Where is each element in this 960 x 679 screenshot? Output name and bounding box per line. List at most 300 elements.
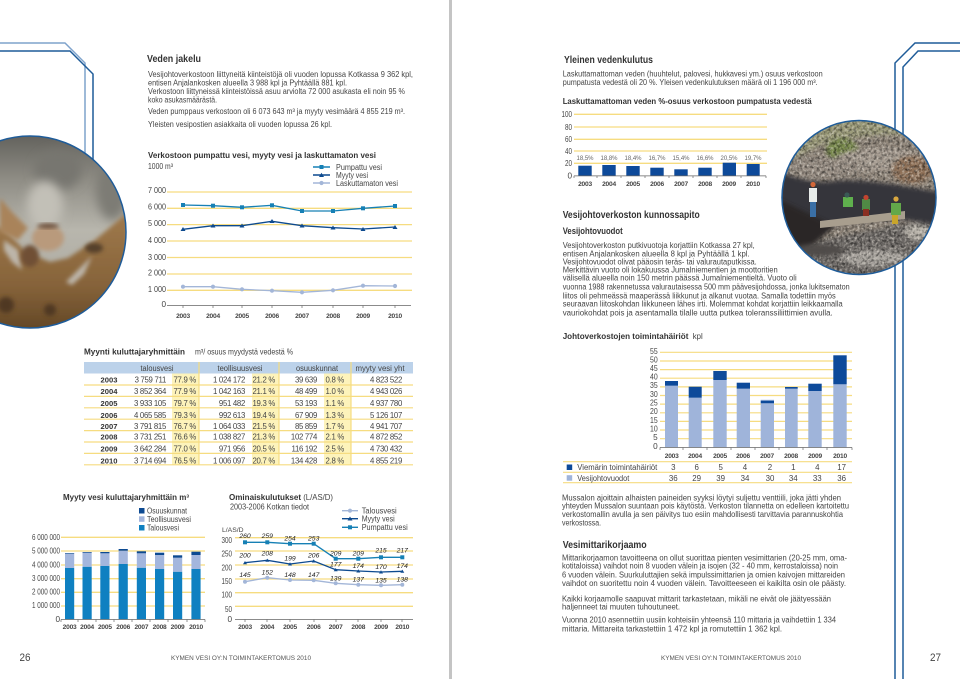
row 2005: 3 933 105 (134, 399, 167, 408)
y axis labels: 3 000 000 (32, 574, 60, 583)
body text: Veden jakelu (148, 70, 413, 129)
data labels: 206 (307, 552, 320, 559)
row 2007: 76.7 % (174, 422, 196, 431)
x axis labels: 2006 (736, 453, 750, 460)
row 2006 (101, 411, 402, 420)
y axis labels: 20 (565, 159, 572, 168)
row 2009: 116 192 (291, 444, 317, 453)
row 2003: 77.9 % (174, 375, 196, 384)
y axis labels: 4 000 (148, 236, 166, 245)
legend (342, 506, 408, 532)
x axis labels: 2008 (153, 624, 167, 631)
y axis labels: 4 000 000 (32, 560, 60, 570)
legend: Pumpattu vesi (362, 523, 408, 532)
legend: Talousvesi (147, 524, 179, 533)
row 2010: 20.7 % (253, 457, 275, 466)
x axis labels: 2009 (171, 624, 185, 631)
x axis labels: 2010 (746, 181, 760, 188)
y axis labels: 7 000 (148, 186, 166, 195)
data labels: 139 (330, 576, 342, 583)
axis line (167, 306, 411, 308)
bars: Teollisuusvesi (65, 551, 201, 572)
axis line (660, 448, 852, 450)
row 2008: 76.6 % (174, 433, 196, 442)
row 2010: 4 855 219 (370, 457, 402, 466)
row 2003: 39 639 (295, 375, 317, 384)
x axis labels: 2008 (351, 624, 366, 631)
data labels: 138 (397, 577, 408, 584)
row 2009: 4 730 432 (370, 444, 402, 453)
row 2008: 1 038 827 (213, 433, 245, 442)
row 2007 (101, 422, 402, 431)
data table row: Viemärin toimintahäiriöt: 2 (768, 463, 772, 472)
left page corner lines (0, 43, 93, 162)
y axis labels: 25 (650, 398, 658, 408)
row 2003: 4 823 522 (370, 375, 402, 384)
body text: vauriokohdat pois ja asentamalla tilalle uutta putkea toleranssiliittimien avulla. (563, 308, 833, 317)
row 2007: 4 941 707 (370, 422, 402, 431)
data labels: 18,8% (600, 156, 618, 162)
page gutter divider (449, 0, 452, 679)
row 2005: 79.7 % (174, 399, 196, 408)
data labels: 18,4% (624, 156, 642, 162)
data labels: 209 (329, 550, 342, 557)
y axis labels: 60 (565, 135, 572, 144)
row 2004: 21.1 % (253, 387, 275, 396)
data labels: 170 (375, 564, 387, 571)
x axis labels: 2004 (206, 313, 220, 320)
row 2007: 85 859 (295, 422, 317, 431)
row 2006: 4 065 585 (134, 411, 167, 420)
data table row: Viemärin toimintahäiriöt: Viemärin toimintahäiriöt (577, 463, 658, 472)
row 2006: 1.3 % (326, 411, 344, 420)
row 2006: 19.4 % (253, 411, 275, 420)
data table row: Viemärin toimintahäiriöt: 17 (837, 463, 846, 472)
body text: vuonna 1988 rakennetussa valurautaisessa 500 mm päävesijohdossa, jonka lukitsematon (563, 283, 850, 292)
body text: 6 vuoden välein. Suurkuluttajien sekä impulssimittarien ja omien kaivojen mittareiden (562, 570, 845, 579)
data table row: Viemärin toimintahäiriöt: 4 (815, 463, 820, 472)
bars: Talousvesi (65, 564, 201, 619)
heading: Vesimittarikorjaamo (563, 539, 647, 551)
worker figures (809, 182, 901, 224)
row 2004: 77.9 % (174, 387, 196, 396)
data table row: Viemärin toimintahäiriöt: 3 (671, 463, 676, 472)
y axis labels: 5 000 000 (32, 546, 60, 556)
chart title: Laskuttamattoman veden %-osuus verkostoon pumpatusta vedestä (563, 97, 812, 106)
row 2010: 134 428 (291, 457, 317, 466)
x axis labels: 2007 (674, 181, 688, 188)
legend: Talousvesi (362, 506, 397, 516)
percent column shading (172, 374, 351, 465)
y axis labels: 40 (650, 372, 658, 382)
y axis labels: 50 (650, 356, 658, 364)
y axis labels: 0 (161, 300, 166, 309)
x axis labels (176, 313, 402, 320)
unit label: L/AS/D (222, 527, 244, 534)
body text: vaihdot on suoritettu noin 4 vuoden välein. Tavoitteeseen ei kaikilta osin ole päästy. (562, 579, 846, 588)
x axis labels: 2005 (235, 313, 249, 320)
y axis labels: 35 (650, 381, 658, 390)
data labels: 16,6% (696, 156, 714, 162)
row 2004: 1 042 163 (213, 387, 245, 396)
row 2003: 2003 (101, 375, 117, 384)
x axis labels: 2008 (698, 181, 712, 188)
row 2003 (101, 375, 402, 384)
row 2010: 1 006 097 (213, 457, 245, 466)
row 2004: 3 852 364 (134, 387, 167, 396)
y axis labels (650, 347, 658, 451)
body text: Veden jakelu: Vesijohtoverkostoon liittyneitä kiinteistöjä oli vuoden lopussa Kotkassa 9 362 kpl, (148, 70, 413, 79)
body text: kotitaloissa) vaihdot noin 8 vuoden välein ja isojen (32 - 40 mm, kerrostaloissa) noin (562, 562, 838, 571)
data labels (576, 156, 762, 162)
sub-heading: Vesijohtovuodot (563, 226, 623, 236)
row 2010: 76.5 % (174, 457, 196, 466)
body text: entisen Anjalankosken alueella 8 kpl ja Pyhtäällä 1 kpl. (563, 250, 750, 258)
y axis labels: 6 000 (148, 202, 166, 212)
y axis labels: 50 (225, 605, 232, 614)
series: Myyty vesi (243, 559, 404, 574)
row 2004: 1.0 % (326, 387, 344, 396)
legend: Teollisuusvesi (147, 515, 191, 524)
y axis labels: 100 (222, 591, 232, 600)
x axis labels: 2007 (329, 624, 343, 631)
y axis labels: 10 (650, 424, 658, 434)
data table row: Viemärin toimintahäiriöt: 6 (695, 463, 700, 472)
y axis labels: 0 (227, 615, 232, 624)
row 2004: 4 943 026 (370, 387, 402, 396)
row 2005: 2005 (101, 399, 118, 408)
text block: Mussalon paineet: verkostomallin avulla ja sen päivitys tuo esiin mahdollisesti tarvittavia parannuskohtia (562, 510, 844, 519)
legend: Pumpattu vesi (336, 163, 382, 172)
data labels: 217 (396, 548, 408, 555)
x axis labels: 2004 (80, 624, 95, 631)
y axis labels: 100 (562, 110, 572, 119)
body text: Vesijohtovuodot olivat pääosin teräs- tai valurautaputkissa. (563, 257, 757, 266)
photo frame left (0, 136, 126, 328)
line chart: Verkostoon pumpattu vesi, myyty vesi ja laskuttamaton vesi (148, 151, 412, 320)
data labels (238, 533, 408, 584)
y axis labels (148, 186, 166, 309)
row 2009: 20.5 % (253, 444, 275, 453)
y axis labels: 2 000 (148, 268, 166, 278)
x axis labels: 2008 (784, 453, 798, 460)
table header labels: teollisuusvesi (218, 364, 263, 373)
data table row: Vesijohtovuodot: Vesijohtovuodot (577, 474, 630, 483)
row 2008: 2008 (101, 433, 117, 442)
row 2006: 67 909 (295, 411, 317, 420)
y axis labels: 15 (650, 416, 658, 425)
row 2008: 2.1 % (326, 433, 344, 442)
x axis labels: 2005 (713, 453, 727, 460)
body text (562, 553, 847, 633)
x axis labels: 2005 (626, 181, 640, 188)
data labels: 18,5% (576, 156, 594, 162)
data table row: Vesijohtovuodot: 39 (716, 474, 726, 483)
body text: pumpatusta vedestä oli 20 %. Yleisen vedenkulutuksen määrä oli 1 196 000 m³. (563, 78, 818, 87)
table unit note: m³/ osuus myydystä vedestä % (195, 348, 293, 356)
axis line (574, 176, 766, 178)
x axis labels: 2009 (808, 453, 822, 460)
x axis labels: 2009 (356, 313, 370, 320)
unit label: 1000 m³ (148, 162, 173, 171)
data labels: 174 (397, 563, 408, 570)
x axis labels: 2007 (134, 624, 149, 631)
row 2005: 4 937 780 (370, 399, 403, 408)
row 2010: 3 714 694 (134, 457, 167, 466)
x axis labels: 2010 (395, 624, 410, 631)
axis line (235, 620, 413, 622)
series: Pumpattu vesi (243, 540, 404, 561)
right page corner lines (895, 43, 960, 679)
table header band (84, 362, 413, 374)
row 2010: 2.8 % (326, 457, 344, 466)
data table row: Viemärin toimintahäiriöt: 1 (791, 463, 795, 472)
data table row: Vesijohtovuodot: 34 (789, 474, 798, 483)
row 2004: 48 499 (295, 387, 317, 396)
text block: Mussalon paineet: yhteyden Mussalon suuntaan pois käytöstä. Verkoston tilannetta on edelleen kartoitettu (562, 502, 849, 511)
heading: Veden jakelu: Veden jakelu (147, 53, 201, 65)
table: Myynti kuluttajaryhmittäin (84, 348, 413, 466)
photo: person under shower (0, 136, 126, 328)
x axis labels: 2005 (98, 624, 112, 631)
bars: Viemärin toimintahäiriöt (665, 355, 847, 403)
axis line (61, 620, 205, 622)
x axis labels: 2003 (176, 313, 190, 320)
x axis labels: 2005 (283, 624, 297, 631)
data labels: 260 (238, 533, 251, 540)
photo frame right (782, 120, 936, 274)
body text: Vuonna 2010 asennettiin uusiin kohteisiin yhteensä 110 mittaria ja vaihdettiin 1 334 (562, 616, 837, 625)
body text: Laskuttamattoman veden (huuhtelut, palovesi, hukkavesi ym.) osuus verkostoon (563, 70, 823, 78)
data labels: 145 (239, 572, 251, 579)
y axis labels: 5 (653, 433, 658, 442)
data labels: 215 (374, 548, 387, 555)
text block: Yleinen vedenkulutus (563, 54, 823, 87)
body text: Merkittävin vuoto oli lokakuussa Jumalniementien ja moottoritien (563, 266, 778, 275)
x axis labels: 2006 (265, 313, 279, 320)
y axis labels: 5 000 (148, 219, 166, 228)
x axis labels: 2003 (665, 453, 679, 460)
body text: Veden jakelu: entisen Anjalankosken alueella 3 988 kpl ja Pyhtäällä 881 kpl. (148, 78, 347, 88)
photo: workers repairing a water pipe (780, 118, 940, 280)
data labels: 208 (261, 551, 273, 558)
x axis labels (665, 453, 847, 460)
row 2009 (101, 444, 402, 453)
series: Talousvesi (243, 576, 404, 587)
legend: Myyty vesi (362, 514, 395, 524)
row 2006: 992 613 (219, 411, 245, 420)
row 2007: 1.7 % (326, 422, 344, 431)
row 2004: 2004 (101, 387, 118, 396)
data labels: 147 (308, 572, 320, 579)
bars: Osuuskunnat (65, 549, 201, 558)
series: Laskuttamaton vesi (181, 284, 397, 294)
row 2005 (101, 399, 403, 408)
data table row: Vesijohtovuodot: 33 (813, 474, 822, 483)
footer right: page number: 27 (930, 652, 941, 664)
x axis labels: 2010 (388, 313, 402, 320)
y axis labels: 0 (55, 615, 60, 624)
y axis labels: 80 (565, 123, 572, 132)
y axis labels: 2 000 000 (32, 588, 60, 596)
row 2006: 5 126 107 (370, 411, 402, 420)
y axis labels: 6 000 000 (32, 533, 60, 542)
data labels: 135 (375, 577, 387, 584)
x axis labels: 2009 (722, 181, 736, 188)
row 2005: 19.3 % (253, 399, 275, 408)
data labels: 137 (353, 577, 364, 584)
x axis labels: 2009 (374, 624, 388, 631)
data table row: Viemärin toimintahäiriöt: 4 (743, 463, 748, 472)
table header labels: myyty vesi yht (356, 364, 405, 373)
bar chart: Laskuttamattoman veden osuus (562, 97, 812, 188)
body text: Veden jakelu: koko asukasmäärästä. (148, 96, 217, 104)
series: Myyty vesi (180, 219, 398, 231)
x axis labels: 2007 (295, 313, 309, 320)
data labels: 174 (353, 563, 364, 570)
data labels: 19,7% (744, 156, 762, 162)
data labels: 199 (284, 555, 296, 562)
row 2003: 21.2 % (253, 375, 275, 384)
y axis labels: 0 (653, 442, 658, 451)
data table row: Vesijohtovuodot: 36 (837, 474, 847, 483)
x axis labels: 2010 (189, 624, 203, 631)
row 2010 (101, 457, 402, 466)
data labels: 209 (352, 550, 364, 557)
row 2009: 3 642 284 (134, 444, 167, 453)
x axis labels: 2006 (307, 624, 321, 631)
row 2008: 4 872 852 (370, 433, 402, 442)
footer left: publication name: KYMEN VESI OY:N TOIMINTAKERTOMUS 2010 (171, 655, 311, 662)
x axis labels: 2004 (602, 181, 616, 188)
footer left: page number: 26 (20, 652, 30, 664)
y axis labels: 55 (650, 347, 658, 356)
body text: välisellä alueella noin 150 metrin päässä Jumalniementieltä. Vuoto oli (563, 274, 797, 283)
series: Pumpattu vesi (181, 203, 397, 213)
row 2006: 79.3 % (174, 411, 196, 420)
legend: Laskuttamaton vesi (336, 179, 398, 188)
row 2005: 1.1 % (326, 399, 344, 408)
data labels: 177 (330, 562, 342, 569)
data table row: Viemärin toimintahäiriöt: 5 (719, 463, 724, 472)
data labels: 148 (284, 572, 296, 579)
row 2008: 3 731 251 (134, 433, 166, 442)
body text (563, 241, 850, 317)
body text: Vesijohtoverkoston putkivuotoja korjattiin Kotkassa 27 kpl, (563, 241, 755, 250)
row 2007: 21.5 % (253, 422, 275, 431)
row 2003: 0.8 % (326, 375, 344, 384)
row 2009: 2.5 % (326, 444, 344, 453)
x axis labels (238, 624, 410, 631)
table header labels (140, 364, 405, 373)
data labels: 200 (238, 553, 251, 560)
row 2003: 1 024 172 (213, 375, 245, 384)
row 2004 (101, 387, 402, 396)
x axis labels: 2010 (833, 453, 847, 460)
section heading: Vesijohtoverkoston kunnossapito (563, 209, 700, 221)
body text: seuraavan liitoskohdan liikkuneen lähes irti. Molemmat kohdat korjattiin leikkaamalla (563, 300, 843, 309)
data labels: 254 (283, 535, 296, 542)
body text: Veden jakelu: Veden pumppaus verkostoon oli 6 073 643 m³ ja myyty vesimäärä 4 855 219 m³. (148, 107, 405, 116)
legend: Myyty vesi (336, 171, 368, 180)
y axis labels: 1 000 000 (32, 601, 60, 610)
row 2007: 2007 (101, 422, 117, 431)
x axis labels: 2003 (238, 624, 252, 631)
bars: Vesijohtovuodot (665, 380, 847, 447)
y axis labels: 1 000 (148, 285, 166, 294)
data labels: 15,4% (672, 156, 690, 162)
x axis labels: 2004 (260, 624, 275, 631)
row 2008 (101, 433, 402, 442)
x axis labels: 2008 (326, 313, 340, 320)
data table row: Vesijohtovuodot: 34 (741, 474, 750, 483)
heading: Yleinen vedenkulutus (564, 54, 653, 66)
legend (313, 163, 398, 188)
text block: Vesimittarikorjaamo (562, 539, 847, 633)
chart subtitle: 2003-2006 Kotkan tiedot (230, 503, 310, 512)
data table row: Viemärin toimintahäiriöt (567, 463, 846, 472)
y axis labels: 300 (222, 536, 232, 545)
x axis labels: 2007 (760, 453, 774, 460)
stacked bar chart: Johtoverkostojen toimintahäiriöt (563, 332, 852, 483)
body text: haljenneet tai muuten tuhoutuneet. (562, 603, 680, 612)
x axis labels: 2003 (578, 181, 592, 188)
chart title: Verkostoon pumpattu vesi, myyty vesi ja laskuttamaton vesi (148, 151, 376, 160)
x axis labels: 2003 (63, 624, 77, 631)
chart title: Ominaiskulutukset (L/AS/D) (229, 493, 333, 502)
bars (578, 163, 760, 176)
y axis labels: 150 (222, 577, 232, 586)
chart title: Myyty vesi kuluttajaryhmittäin m³ (63, 493, 189, 502)
table title: Myynti kuluttajaryhmittäin (84, 348, 185, 356)
y axis labels: 3 000 (148, 253, 166, 262)
text block: Veden jakelu (147, 53, 413, 129)
data labels: 253 (307, 536, 320, 543)
legend: Osuuskunnat (147, 507, 188, 516)
row 2007: 1 064 033 (213, 422, 245, 431)
row 2005: 951 482 (219, 399, 245, 408)
line chart: Ominaiskulutukset (222, 493, 413, 631)
y axis labels: 250 (222, 550, 232, 559)
table header labels: osuuskunnat (296, 364, 339, 373)
body text: liitos oli pehmeässä maaperässä liikkunut ja alkanut vuotaa. Samalla todettiin myös (563, 291, 836, 300)
data table row: Vesijohtovuodot (567, 474, 847, 483)
body text: Mittarikorjaamon tavoitteena on ollut suorittaa pienten vesimittarien (20-25 mm, oma- (562, 553, 847, 562)
data labels: 152 (262, 569, 273, 576)
bar chart: Myyty vesi kuluttajaryhmittäin (32, 493, 205, 631)
text block: Mussalon paineet: verkostossa. (562, 519, 601, 528)
text block: Mussalon paineet (562, 493, 849, 528)
body text: mittaria. Mittareita tarkastettiin 1 472 kpl ja romutettiin 1 362 kpl. (562, 624, 782, 633)
data table row: Vesijohtovuodot: 29 (692, 474, 702, 483)
y axis labels: 200 (222, 563, 232, 572)
x axis labels (63, 624, 203, 631)
data labels: 20,5% (720, 156, 738, 162)
row 2010: 2010 (101, 457, 117, 466)
row 2005: 53 193 (295, 399, 317, 408)
body text: Veden jakelu: Yleisten vesipostien asiakkaita oli vuoden lopussa 26 kpl. (148, 120, 332, 129)
y axis labels (32, 533, 60, 624)
data table row: Vesijohtovuodot: 36 (669, 474, 678, 483)
chart title: Johtoverkostojen toimintahäiriöt kpl (563, 332, 703, 341)
y axis labels (222, 536, 232, 624)
data labels: 16,7% (648, 156, 666, 162)
x axis labels: 2006 (650, 181, 664, 188)
x axis labels: 2006 (116, 624, 131, 631)
body text: Veden jakelu: Verkostoon liittyneissä kiinteistöissä asuu arviolta 72 000 asukasta eli noin 95 % (148, 87, 405, 96)
row 2009: 77.0 % (174, 444, 196, 453)
row 2006: 2006 (101, 411, 117, 420)
